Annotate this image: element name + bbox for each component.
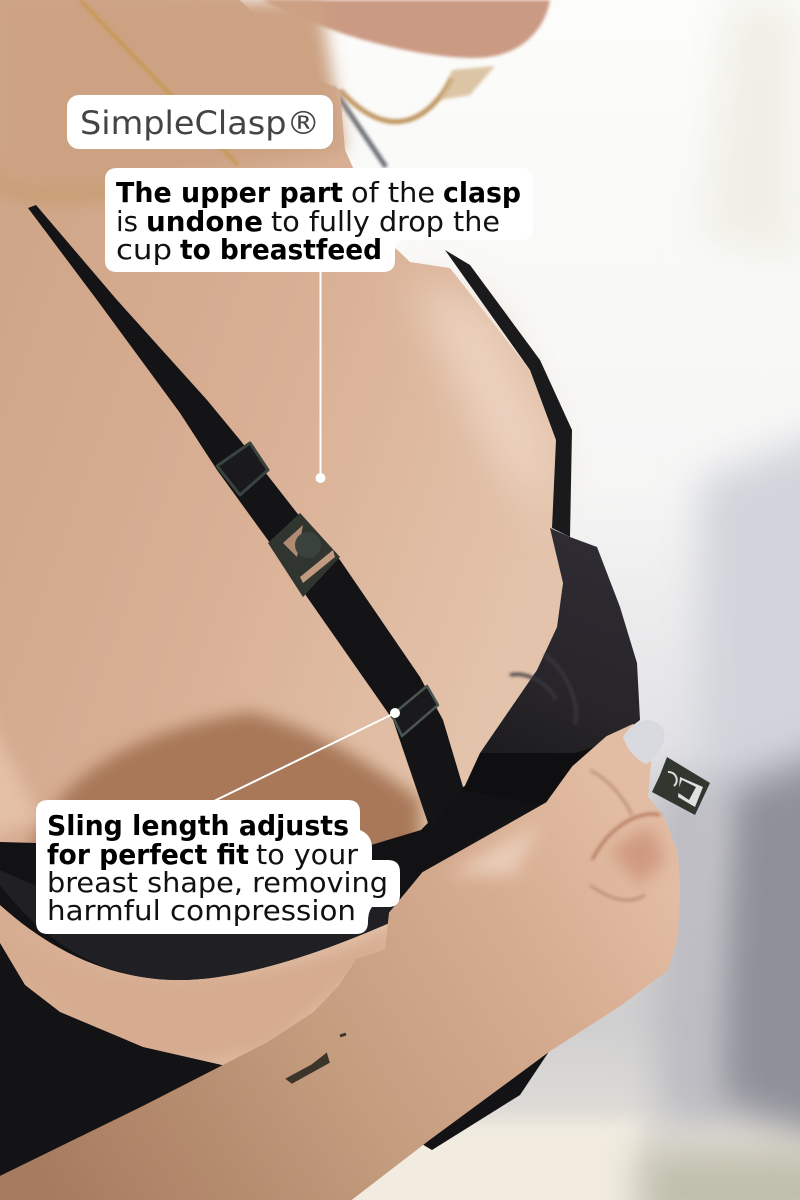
icon: dangling clasp	[652, 757, 710, 815]
callout: upper part of clasp: The upper part	[116, 176, 343, 209]
callout: sling length: harmful compression	[47, 894, 356, 927]
photo: bra band and cup	[0, 250, 640, 980]
icon: clasp buckle	[268, 513, 340, 597]
icon: upper slider	[217, 443, 268, 495]
callout: upper part of clasp: to breastfeed	[180, 233, 382, 266]
callout: upper part of clasp: of the	[351, 176, 435, 209]
callout: upper part of clasp: to fully drop the	[271, 205, 500, 238]
photo: torso shading	[0, 0, 550, 1070]
callout: upper part of clasp: clasp	[443, 176, 521, 209]
callout: sling length: breast shape, removing	[47, 866, 388, 899]
callout line: sling	[210, 708, 400, 803]
callout: sling length: to your	[256, 838, 358, 871]
callout: upper part of clasp: undone	[146, 205, 263, 238]
callout: upper part of clasp: is	[116, 205, 138, 238]
photo: hand holding clasp	[0, 720, 679, 1200]
photo: black underwear	[0, 943, 550, 1190]
callout: sling length: for perfect fit	[47, 838, 249, 871]
callout: upper part of clasp: cup	[116, 233, 172, 266]
label: SimpleClasp: SimpleClasp®	[80, 104, 320, 142]
label: SimpleClasp	[67, 95, 333, 149]
photo: bra strap with clasp	[28, 205, 463, 830]
callout line: clasp	[316, 260, 326, 483]
icon: wrist tattoo	[288, 1034, 346, 1082]
callout: sling length	[36, 800, 400, 934]
icon: thumbnail	[623, 720, 665, 764]
callout: upper part of clasp	[105, 168, 533, 272]
callout: sling length: Sling length adjusts	[47, 809, 349, 842]
photo: chin and hair	[0, 0, 563, 1110]
icon: lower slider	[392, 686, 438, 736]
